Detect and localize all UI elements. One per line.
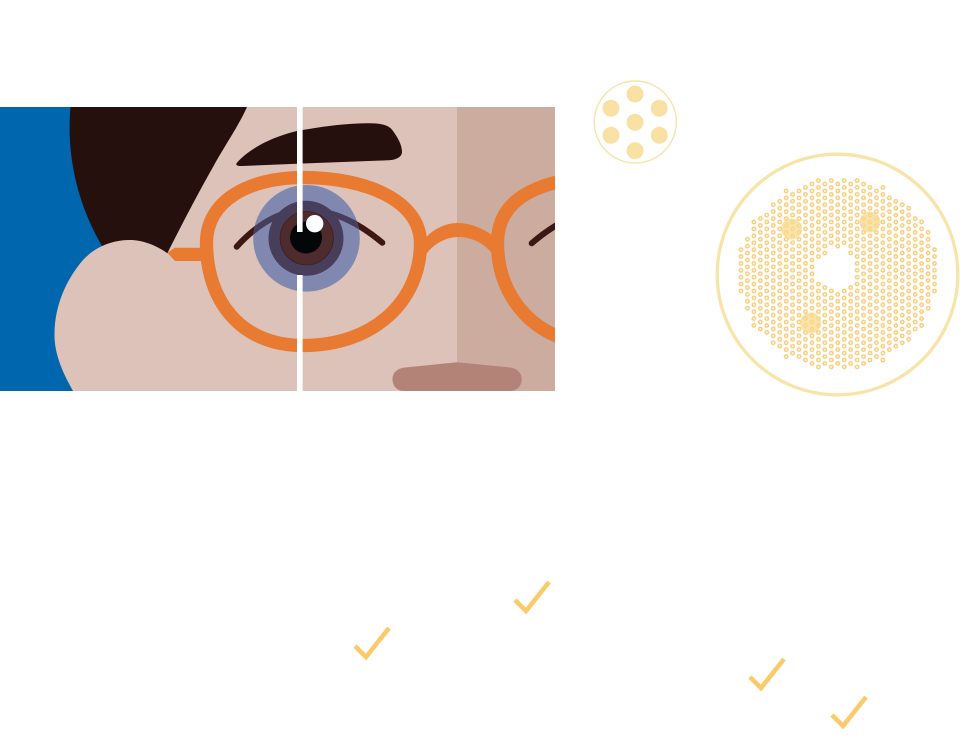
glasses: right lens frame [498, 181, 562, 338]
eye: dark ring [268, 201, 344, 276]
glasses temple arm [168, 248, 201, 261]
nose shadow [457, 107, 555, 391]
glasses: left lens frame [206, 178, 420, 346]
check mark 4 [832, 697, 866, 726]
check mark 2 [355, 628, 389, 657]
face skin [167, 107, 457, 391]
divider line: lower [297, 275, 303, 391]
eye: highlight [306, 215, 323, 232]
hair [70, 107, 247, 254]
check mark 3 [750, 659, 784, 688]
large lens outline [717, 154, 958, 395]
panel: face illustration [0, 107, 562, 391]
eyelash: left eye [234, 221, 386, 250]
small lens spots [602, 86, 668, 159]
small lens diagram [594, 81, 676, 163]
small lens outline [594, 81, 676, 163]
eye: iris [280, 212, 333, 265]
glasses: bridge [426, 223, 492, 254]
ear [54, 240, 175, 391]
background: blue [0, 107, 103, 391]
eye: pupil [290, 222, 322, 254]
check mark 1 [515, 582, 549, 611]
nose [392, 362, 522, 391]
lens micro-dot ring field [738, 177, 938, 370]
lens solid spots [781, 212, 880, 334]
large lens diagram [717, 154, 958, 395]
divider line: upper [297, 107, 303, 232]
eyebrow [236, 123, 402, 166]
eyelash: right eye [532, 223, 560, 243]
eye: blue treatment zone [253, 185, 360, 292]
eyelash seen through blue zone [254, 210, 359, 234]
